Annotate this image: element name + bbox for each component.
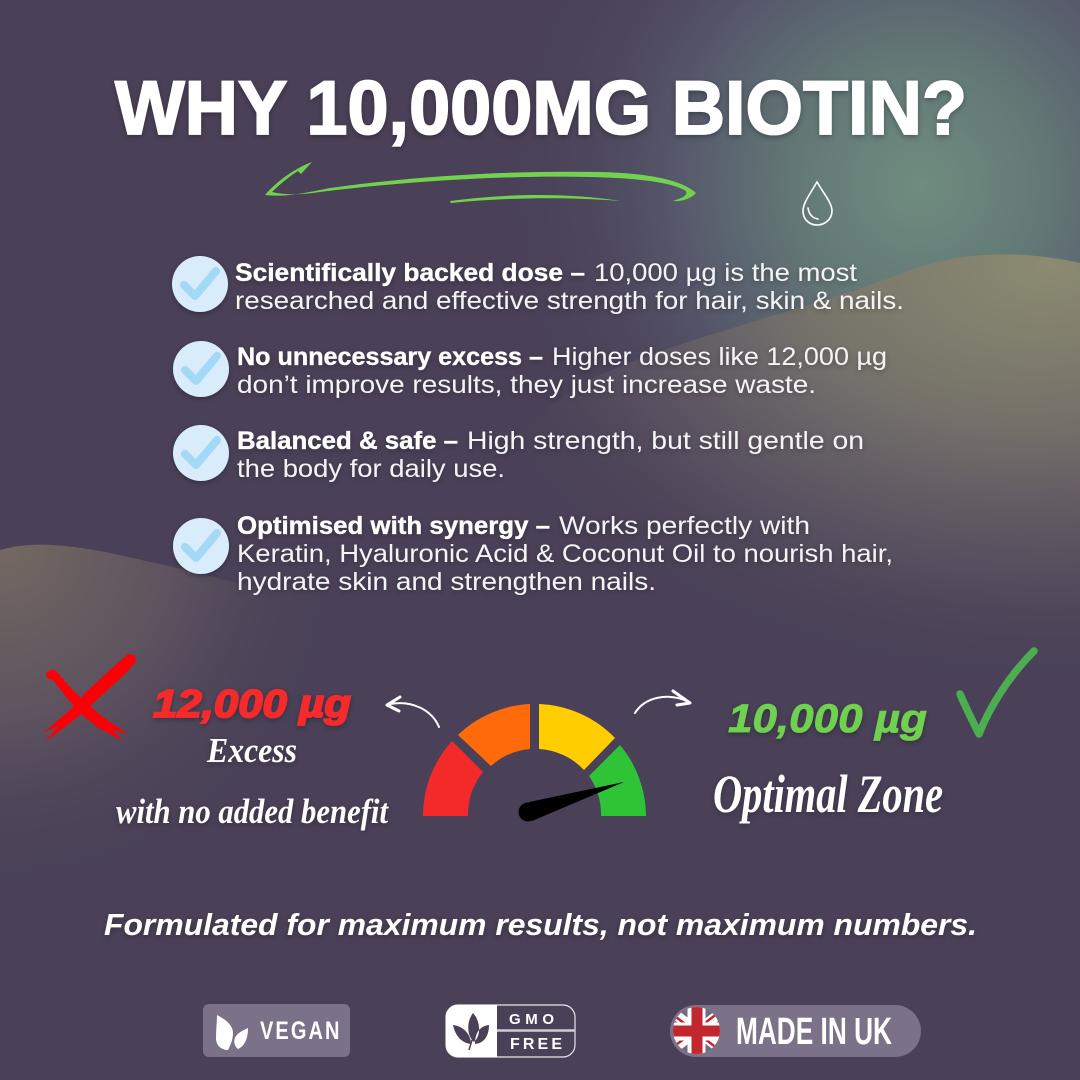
panel: benefits list [172, 256, 904, 596]
arrow: to excess [387, 697, 439, 727]
badge: made in UK: MADE IN UK [736, 1011, 892, 1053]
icon: water drop [803, 182, 832, 225]
excess dose value: 12,000 µg [153, 683, 351, 726]
benefit 3: High strength, but still gentle on [467, 427, 864, 455]
excess caption: Excess [206, 731, 297, 770]
arrow: to optimal [635, 691, 690, 713]
benefit 4: Keratin, Hyaluronic Acid & Coconut Oil to nourish hair, [237, 540, 893, 568]
icon: UK flag [673, 1007, 720, 1054]
tagline: Formulated for maximum results, not maximum numbers. [104, 907, 977, 942]
benefit 2 [173, 341, 887, 399]
gauge needle [518, 782, 624, 822]
optimal dose value: 10,000 µg [728, 697, 927, 741]
benefit 4: Works perfectly with [559, 512, 810, 540]
benefit 3 [173, 425, 864, 483]
excess caption [116, 731, 389, 831]
benefit 3: Balanced & safe – [237, 427, 458, 455]
icon: red cross [43, 654, 136, 742]
badge: GMO free: FREE [510, 1036, 562, 1053]
benefit 3: the body for daily use. [237, 455, 505, 483]
benefit 2: don’t improve results, they just increase waste. [237, 371, 816, 399]
benefit 2: Higher doses like 12,000 µg [552, 343, 887, 371]
badge: made in UK [670, 1005, 921, 1057]
benefit 4: Optimised with synergy – [237, 512, 550, 540]
title: WHY 10,000MG BIOTIN? [115, 66, 967, 151]
badge: vegan [203, 1004, 350, 1057]
optimal caption: Optimal Zone [713, 764, 943, 824]
green brush arrow underline [265, 162, 696, 203]
benefit 2: No unnecessary excess – [237, 343, 543, 371]
benefit 1: Scientifically backed dose – [235, 259, 585, 287]
benefit 4: hydrate skin and strengthen nails. [237, 568, 656, 596]
benefit 1: 10,000 µg is the most [594, 259, 857, 287]
benefit 1: researched and effective strength for hair, skin & nails. [235, 287, 904, 315]
excess caption: with no added benefit [116, 792, 389, 831]
benefit 4 [173, 512, 893, 596]
badge: GMO free: GMO [509, 1011, 554, 1028]
badge: GMO free [446, 1005, 575, 1057]
badge: vegan: VEGAN [260, 1017, 341, 1045]
benefit 1 [172, 256, 904, 315]
gauge [423, 704, 646, 822]
icon: green check [960, 651, 1034, 734]
